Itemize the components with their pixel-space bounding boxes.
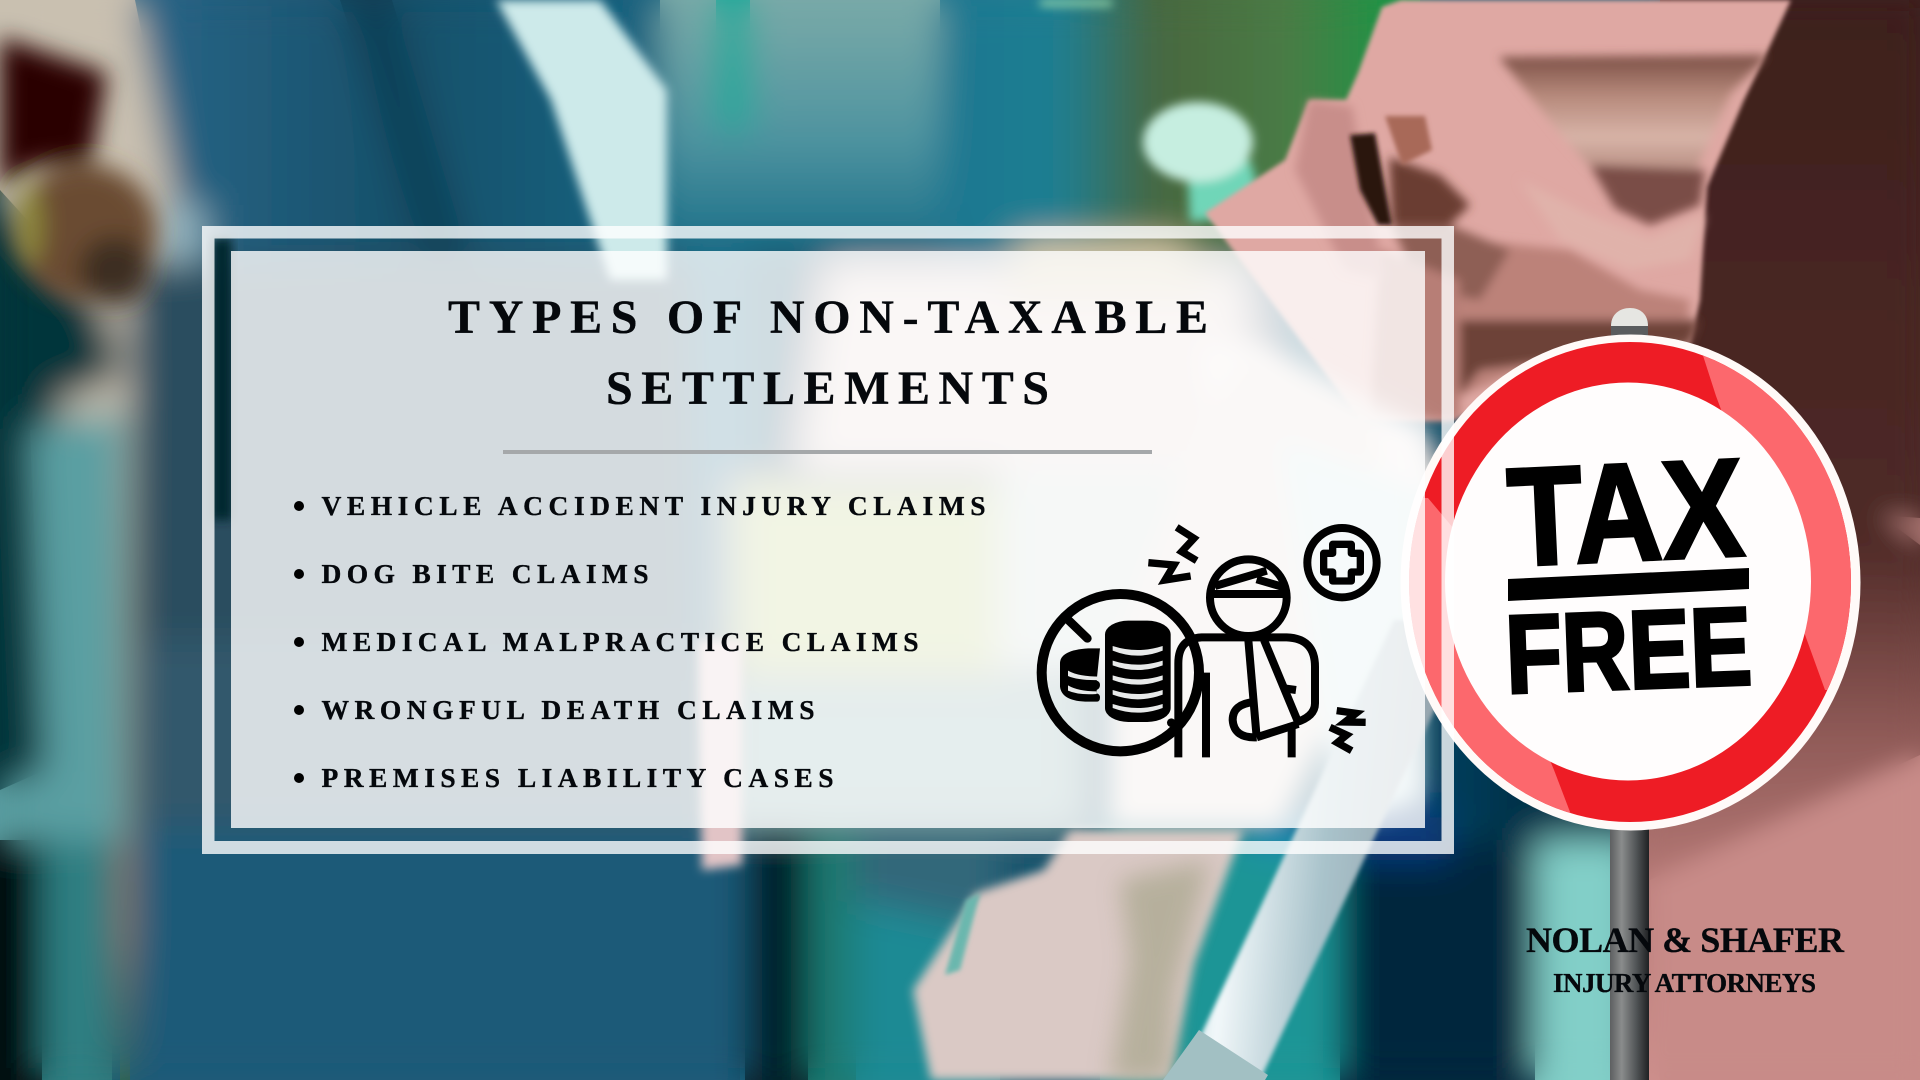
icon: large coin stack (1105, 621, 1171, 722)
crutch cuff and forearm behind card (1110, 345, 1440, 826)
sign top knob (1611, 308, 1648, 338)
item: dog bite: DOG BITE CLAIMS (322, 558, 648, 589)
sign white edge (1400, 334, 1860, 830)
icon: bandaged head (1210, 559, 1287, 636)
icon: pain marks (1148, 527, 1366, 751)
sign red ring (1409, 342, 1851, 822)
icon: prohibition circle (1042, 594, 1199, 751)
hand gripping crutch (913, 830, 1243, 1080)
divider rule (503, 450, 1152, 454)
title: TYPES OF NON-TAXABLE (448, 291, 1208, 344)
sleeve folds (1295, 55, 1768, 420)
panel: translucent frame (202, 226, 1454, 854)
TAX lettering: TAX (1504, 428, 1747, 596)
icon: small coin stack (1060, 648, 1100, 702)
FREE lettering: FREE (1503, 584, 1754, 717)
logo: law firm name (1526, 920, 1845, 998)
green backlight and glow (1040, 0, 1266, 222)
icon: medical cross badge (1307, 528, 1377, 597)
hand at left edge (0, 37, 157, 304)
item: vehicle accident: VEHICLE ACCIDENT INJURY CLAIMS (322, 490, 986, 521)
white shirt strip (496, 0, 667, 280)
sign pole (1610, 820, 1649, 1080)
rolled pink sleeve (1205, 0, 1791, 420)
panel: translucent card (231, 251, 1425, 828)
ring highlight wedges (1409, 356, 1851, 813)
dark frame-corner shadow (212, 238, 232, 520)
icon: body with arm sling (1167, 637, 1315, 757)
sign white centre (1445, 382, 1811, 780)
right cloth colour fields (1640, 0, 1920, 1080)
sign rule (1508, 568, 1749, 601)
title: SETTLEMENTS (606, 362, 1049, 415)
right cloth: patient's trousers (1640, 0, 1920, 1080)
item: premises liability: PREMISES LIABILITY CASES (322, 762, 834, 793)
title (448, 291, 1208, 415)
item: wrongful death: WRONGFUL DEATH CLAIMS (322, 694, 814, 725)
Tax Free road sign (1400, 334, 1860, 830)
settlement list (294, 490, 986, 793)
item: medical malpractice: MEDICAL MALPRACTICE CLAIMS (322, 626, 918, 657)
crutch shaft (1180, 620, 1477, 1080)
crutch lower collar (1163, 1030, 1268, 1080)
pale forearm streak behind the card (698, 640, 742, 870)
logo: law firm name: NOLAN & SHAFER (1526, 920, 1845, 960)
logo: law firm name: INJURY ATTORNEYS (1553, 968, 1816, 998)
icon: injured person with no-tax coins (1042, 527, 1377, 757)
